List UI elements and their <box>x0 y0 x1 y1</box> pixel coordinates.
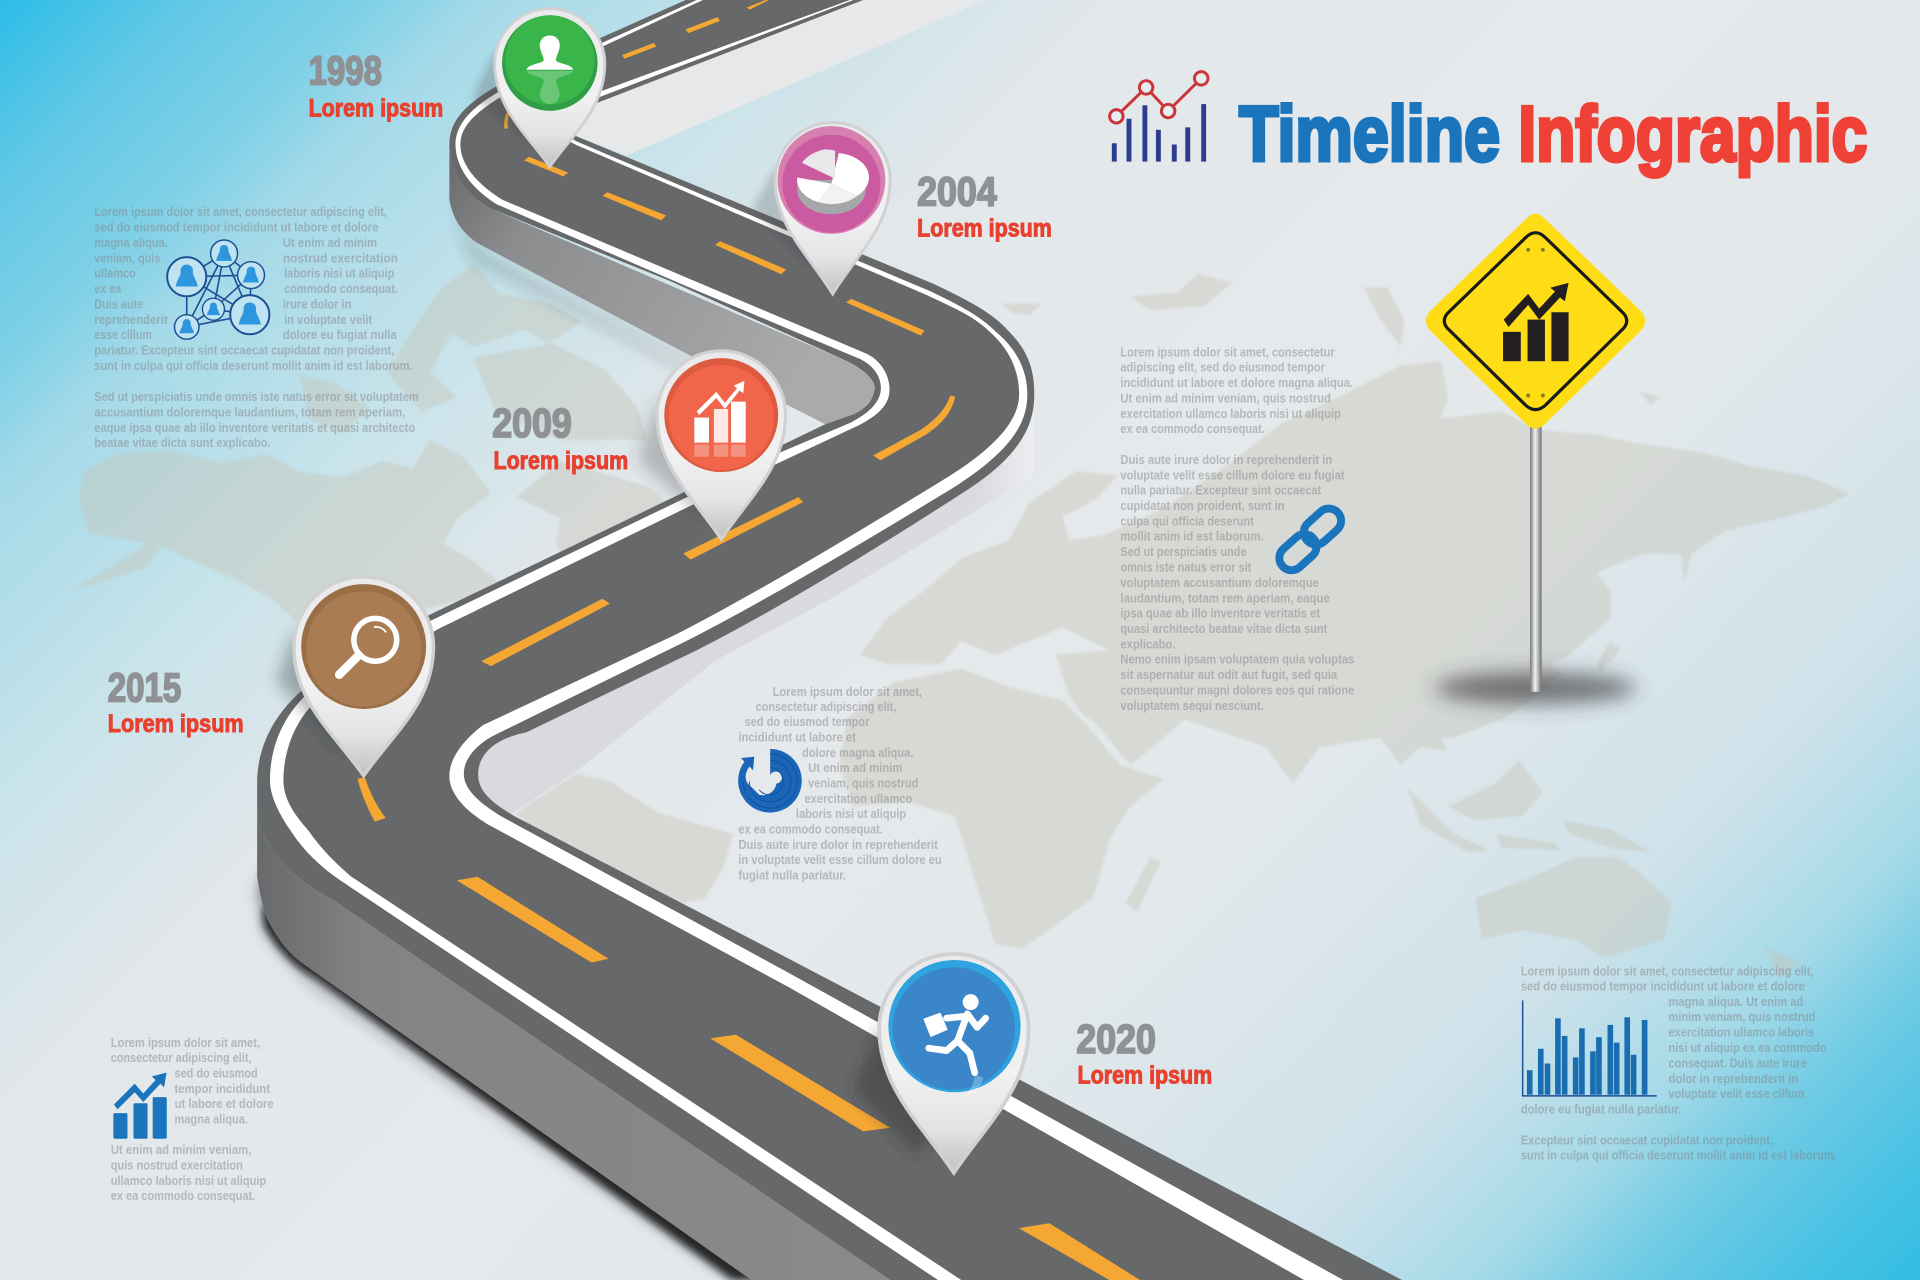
text block: centre right with chain: ex ea commodo consequat. <box>1120 421 1265 436</box>
text block: centre right with chain: Ut enim ad minim veniam, quis nostrud <box>1120 390 1331 405</box>
text block: centre right with chain: Nemo enim ipsam voluptatem quia voluptas <box>1120 652 1354 667</box>
label: 2020: 2020 <box>1076 1016 1156 1062</box>
text block: upper left: veniam, quis <box>94 250 160 265</box>
label: 1998: Lorem ipsum <box>309 94 443 122</box>
text block: lower left <box>111 1035 274 1203</box>
logo icon: line and bar chart <box>1110 72 1208 162</box>
text block: lower left: ullamco laboris nisi ut aliquip <box>111 1173 266 1188</box>
text block: lower left: ut labore et dolore <box>174 1096 274 1111</box>
bar chart <box>1523 1000 1657 1096</box>
text block: lower right: minim veniam, quis nostrud <box>1668 1009 1815 1024</box>
title <box>1239 89 1867 177</box>
pin: 2020 blue <box>853 954 1029 1173</box>
text block: upper left: dolore eu fugiat nulla <box>283 327 398 342</box>
text block: centre right with chain: voluptatem accusantium doloremque <box>1120 575 1319 590</box>
text block: lower right: exercitation ullamco laboris <box>1668 1025 1814 1040</box>
road side walls <box>257 0 1034 1280</box>
text block: upper left: Duis aute <box>94 297 143 312</box>
text block: lower right <box>1521 963 1837 1163</box>
text block: centre right with chain: nulla pariatur. Excepteur sint occaecat <box>1120 483 1322 498</box>
text block: centre right with chain: sit aspernatur aut odit aut fugit, sed quia <box>1120 667 1338 682</box>
text block: centre right with chain: voluptate velit esse cillum dolore eu fugiat <box>1120 467 1345 482</box>
text block: centre with donut <box>738 684 942 882</box>
text block: upper left: ullamco <box>94 266 136 281</box>
text block: centre with donut: Ut enim ad minim <box>808 760 902 775</box>
text block: centre with donut: ex ea commodo consequat. <box>738 821 883 836</box>
icon: growth bars <box>113 1073 167 1139</box>
road base shadows <box>257 202 784 1280</box>
text block: upper left: nostrud exercitation <box>283 250 398 265</box>
text block: lower right: sunt in culpa qui officia deserunt mollit anim id est laborum. <box>1521 1148 1837 1163</box>
label: 2004: Lorem ipsum <box>917 214 1052 242</box>
text block: centre with donut: dolore magna aliqua. <box>802 745 913 760</box>
text block: centre right with chain: incididunt ut labore et dolore magna aliqua. <box>1120 375 1353 390</box>
text block: upper left: laboris nisi ut aliquip <box>284 266 394 281</box>
text block: upper left: ex ea <box>94 281 122 296</box>
text block: centre right with chain: Sed ut perspiciatis unde <box>1120 544 1247 559</box>
title: Timeline <box>1239 89 1500 177</box>
text block: upper left: eaque ipsa quae ab illo inventore veritatis et quasi architecto <box>94 420 415 435</box>
text block: lower right: consequat. Duis aute irure <box>1668 1055 1807 1070</box>
text block: centre right with chain: Duis aute irure dolor in reprehenderit in <box>1120 452 1332 467</box>
text block: lower right: Excepteur sint occaecat cupidatat non proident, <box>1521 1132 1773 1147</box>
text block: lower right: magna aliqua. Ut enim ad <box>1668 994 1803 1009</box>
text block: centre with donut: incididunt ut labore et <box>738 730 857 745</box>
label: 2020 <box>1076 1016 1212 1090</box>
world map <box>70 265 1850 980</box>
text block: centre right with chain: adipiscing elit, sed do eiusmod tempor <box>1120 360 1325 375</box>
text block: lower right: dolore eu fugiat nulla pariatur. <box>1521 1102 1681 1117</box>
pin: 2004 pink <box>752 122 890 294</box>
label: 2015 <box>108 665 244 738</box>
text block: upper left: Lorem ipsum dolor sit amet, consectetur adipiscing elit, <box>94 204 387 219</box>
text block: centre with donut: exercitation ullamco <box>804 791 912 806</box>
icon: radial donut chart <box>738 749 802 813</box>
text block: upper left: accusantium doloremque laudantium, totam rem aperiam, <box>94 404 405 419</box>
text block: lower right: sed do eiusmod tempor incididunt ut labore et dolore <box>1521 979 1805 994</box>
label: 1998: 1998 <box>309 47 382 93</box>
text block: centre right with chain: quasi architecto beatae vitae dicta sunt <box>1120 621 1328 636</box>
pin: 2009 orange <box>638 351 786 539</box>
road surface <box>257 0 1402 1280</box>
text block: centre with donut: sed do eiusmod tempor <box>744 714 869 729</box>
text block: upper left: reprehenderit <box>94 312 168 327</box>
text block: upper left: beatae vitae dicta sunt explicabo. <box>94 435 271 450</box>
text block: lower left: magna aliqua. <box>174 1112 248 1127</box>
label: 2009 <box>492 400 628 475</box>
text block: lower left: Lorem ipsum dolor sit amet, <box>111 1035 260 1050</box>
text block: upper left: commodo consequat. <box>284 281 398 296</box>
icon: people network <box>167 240 269 339</box>
label: 2020: Lorem ipsum <box>1078 1062 1212 1090</box>
label: 2004: 2004 <box>917 169 997 215</box>
text block: upper left: Sed ut perspiciatis unde omnis iste natus error sit voluptatem <box>94 389 419 404</box>
text block: lower left: quis nostrud exercitation <box>111 1157 243 1172</box>
label: 1998 <box>309 47 443 122</box>
text block: upper left: magna aliqua. <box>94 235 168 250</box>
text block: centre right with chain: voluptatem sequi nesciunt. <box>1120 698 1264 713</box>
text block: centre right with chain: exercitation ullamco laboris nisi ut aliquip <box>1120 406 1341 421</box>
text block: centre with donut: veniam, quis nostrud <box>808 776 918 791</box>
road centre dashes <box>358 0 1140 1280</box>
text block: lower right: dolor in reprehenderit in <box>1668 1071 1798 1086</box>
text block: lower right: voluptate velit esse cillum <box>1668 1086 1804 1101</box>
text block: centre right with chain: explicabo. <box>1120 636 1176 651</box>
text block: centre with donut: Duis aute irure dolor in reprehenderit <box>738 837 939 852</box>
text block: centre right with chain: omnis iste natus error sit <box>1120 560 1252 575</box>
text block: centre with donut: Lorem ipsum dolor sit amet, <box>773 684 922 699</box>
text block: centre right with chain: consequuntur magni dolores eos qui ratione <box>1120 683 1354 698</box>
text block: upper left: esse cillum <box>94 327 152 342</box>
text block: centre with donut: fugiat nulla pariatur. <box>738 867 846 882</box>
text block: upper left: in voluptate velit <box>284 312 373 327</box>
text block: lower left: sed do eiusmod <box>174 1066 258 1081</box>
text block: upper left <box>94 204 419 450</box>
text block: lower left: consectetur adipiscing elit, <box>111 1050 252 1065</box>
text block: centre with donut: consectetur adipiscing elit, <box>756 699 896 714</box>
text block: centre right with chain <box>1120 344 1354 713</box>
label: 2015: 2015 <box>108 665 181 711</box>
text block: centre right with chain: mollit anim id est laborum. <box>1120 529 1264 544</box>
text block: upper left: irure dolor in <box>283 297 351 312</box>
text block: lower right: Lorem ipsum dolor sit amet, consectetur adipiscing elit, <box>1521 963 1813 978</box>
text block: centre right with chain: laudantium, totam rem aperiam, eaque <box>1120 590 1330 605</box>
icon: chain link <box>1274 504 1346 575</box>
label: 2009: 2009 <box>492 400 572 446</box>
text block: centre with donut: laboris nisi ut aliquip <box>796 806 906 821</box>
text block: centre right with chain: culpa qui officia deserunt <box>1120 513 1255 528</box>
pin: 1998 green <box>473 9 605 167</box>
text block: centre right with chain: ipsa quae ab illo inventore veritatis et <box>1120 606 1321 621</box>
text block: lower left: Ut enim ad minim veniam, <box>111 1142 252 1157</box>
text block: centre right with chain: Lorem ipsum dolor sit amet, consectetur <box>1120 344 1335 359</box>
text block: upper left: sunt in culpa qui officia deserunt mollit anim id est laborum. <box>94 358 413 373</box>
text block: upper left: Ut enim ad minim <box>283 235 377 250</box>
label: 2015: Lorem ipsum <box>108 710 244 738</box>
pin: 2015 brown <box>276 577 433 776</box>
text block: lower right: nisi ut aliquip ex ea commodo <box>1668 1040 1827 1055</box>
text block: centre with donut: in voluptate velit esse cillum dolore eu <box>738 852 942 867</box>
text block: lower left: tempor incididunt <box>174 1081 271 1096</box>
text block: upper left: sed do eiusmod tempor incididunt ut labore et dolore <box>94 219 378 234</box>
label: 2004 <box>917 169 1052 242</box>
label: 2009: Lorem ipsum <box>493 447 628 475</box>
text block: upper left: pariatur. Excepteur sint occaecat cupidatat non proident, <box>94 343 394 358</box>
road sign <box>1426 214 1645 704</box>
text block: centre right with chain: cupidatat non proident, sunt in <box>1120 498 1284 513</box>
text block: lower left: ex ea commodo consequat. <box>111 1188 255 1203</box>
